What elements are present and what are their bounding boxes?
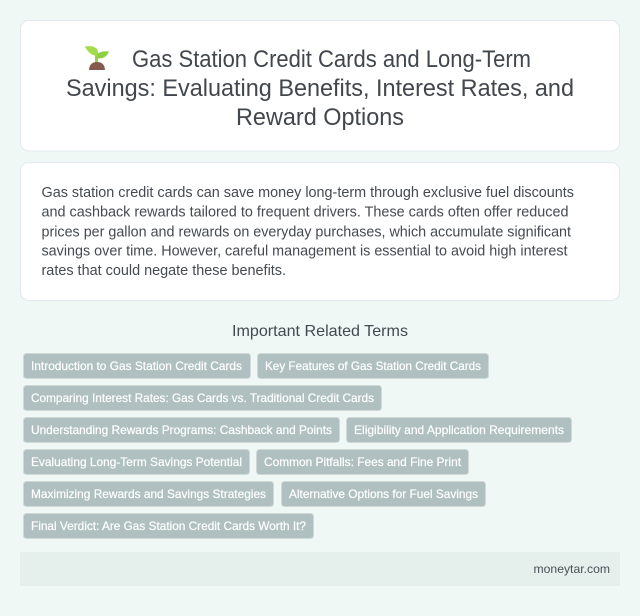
summary text: and cashback rewards tailored to frequent drivers. These cards often offer reduced: [42, 204, 568, 220]
icon: seedling: [85, 46, 109, 70]
tag: long-term savings: [24, 450, 250, 474]
tag: rewards programs: Understanding Rewards Programs: Cashback and Points: [31, 423, 332, 437]
heading: important related terms: Important Related Terms: [232, 323, 408, 340]
footer: [20, 552, 620, 586]
title: Savings: Evaluating Benefits, Interest Rates, and: [66, 75, 574, 102]
tag: comparing interest rates: Comparing Interest Rates: Gas Cards vs. Traditional Credit Cards: [31, 391, 374, 405]
summary text: Gas station credit cards can save money long-term through exclusive fuel discounts: [42, 185, 574, 201]
panel: title card: [20, 20, 620, 151]
tag: final verdict: [24, 514, 314, 538]
panel: summary card: [20, 162, 620, 300]
title: Gas Station Credit Cards and Long-Term: [132, 46, 531, 73]
tag: common pitfalls: [256, 450, 468, 474]
tag: eligibility: Eligibility and Application Requirements: [354, 423, 564, 437]
tag: key features: Key Features of Gas Station Credit Cards: [265, 359, 481, 373]
tag: final verdict: Final Verdict: Are Gas Station Credit Cards Worth It?: [31, 519, 306, 533]
tag: introduction: Introduction to Gas Station Credit Cards: [31, 359, 242, 373]
summary text: prices per gallon and rewards on everyday purchases, which accumulate significant: [42, 224, 571, 240]
summary text: rates that could negate these benefits.: [42, 263, 286, 279]
summary text: savings over time. However, careful management is essential to avoid high interest: [42, 244, 568, 260]
tag: maximizing rewards: [24, 482, 274, 506]
tag: common pitfalls: Common Pitfalls: Fees and Fine Print: [264, 455, 462, 469]
tag: eligibility: [346, 418, 572, 442]
footer source text: moneytar.com: [534, 562, 610, 576]
tag: long-term savings: Evaluating Long-Term Savings Potential: [31, 455, 242, 469]
tag: alternative options: [282, 482, 486, 506]
title: [66, 46, 574, 131]
tag list: [24, 354, 572, 538]
title: Reward Options: [236, 104, 404, 131]
tag: key features: [258, 354, 488, 378]
tag: maximizing rewards: Maximizing Rewards and Savings Strategies: [31, 487, 266, 501]
summary text: [42, 185, 574, 279]
tag: introduction: [24, 354, 250, 378]
tag: rewards programs: [24, 418, 340, 442]
tag: alternative options: Alternative Options for Fuel Savings: [289, 487, 478, 501]
tag: comparing interest rates: [24, 386, 382, 410]
